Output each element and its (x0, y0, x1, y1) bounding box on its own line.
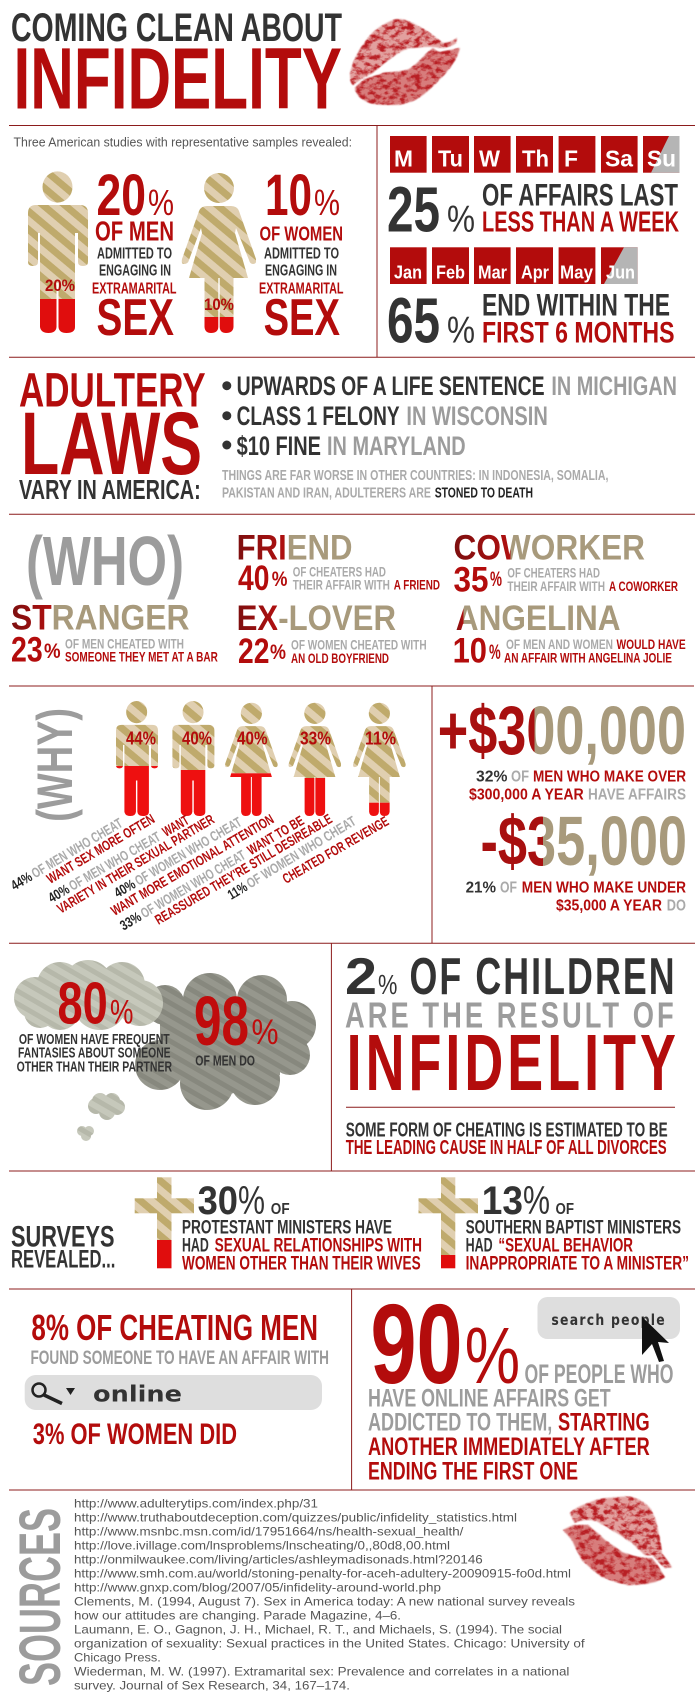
text: other countries: PAKISTAN AND IRAN, ADULTERERS ARE (222, 486, 431, 502)
list: state penalties: IN WISCONSIN (406, 401, 548, 431)
stat: angelina (453, 599, 686, 671)
panel: affair duration (387, 136, 680, 357)
stat: friend: 40 (238, 559, 269, 598)
icon: cross 13% (418, 1177, 478, 1268)
calendar: months: Apr (521, 262, 549, 282)
stat: 90% (370, 1281, 674, 1407)
stat: southern baptist ministers: “SEXUAL BEHAVIOR (498, 1235, 633, 1257)
stat: over 300,000: 32% (476, 769, 507, 786)
text: source list: Wiederman, M. W. (1997). Extramarital sex: Prevalence and correlates in a national (74, 1664, 569, 1678)
icon: light thought cloud (14, 960, 163, 1030)
stat: protestant ministers: 30 (198, 1179, 238, 1223)
text: angled reasons: OF WOMEN WHO CHEAT (132, 813, 245, 888)
text: 8% of cheating men (30, 1307, 329, 1369)
stat: protestant ministers: SEXUAL RELATIONSHIPS WITH (215, 1235, 422, 1257)
text: 10% of women: % (314, 182, 340, 223)
stat: protestant ministers: WOMEN OTHER THAN THEIR WIVES (182, 1252, 421, 1274)
stat: 90%: % (465, 1311, 520, 1400)
stat: stranger: STRANGER (11, 598, 190, 637)
panel: who (11, 522, 686, 671)
title (11, 6, 342, 128)
stat: under 35,000: 21% (466, 879, 496, 896)
heading: why: (WHY) (27, 708, 83, 822)
text: angled reasons: WANT MORE EMOTIONAL ATTENTION (108, 811, 276, 919)
text: angled reasons: REASSURED THEY'RE STILL DESIREABLE (152, 810, 335, 928)
stat: coworker: COWORKER (454, 528, 645, 567)
text: 20% of men: 20 (96, 163, 146, 228)
stat: friend: % (272, 568, 288, 591)
panel: fantasies (14, 960, 316, 1141)
calendar: months: May (560, 262, 593, 282)
stat: 2% of children: % (378, 969, 397, 1000)
stat: angelina: ANGELINA (456, 599, 621, 638)
text: source list: Clements, M. (1994, August 7). Sex in America today: A new national survey reveals (74, 1594, 575, 1608)
text: source list: organization of sexuality: Sexual practices in the United States. Chicago: University of (74, 1636, 585, 1650)
stat: 80% of women: 80 (58, 970, 108, 1036)
icon: dark thought cloud (135, 973, 316, 1110)
panel: sources (8, 1496, 672, 1692)
calendar: days of week: F (564, 146, 578, 172)
text: angled reasons: WANT SEX MORE OFTEN (44, 810, 157, 887)
icon: cursor arrow (642, 1317, 669, 1362)
stat: 2% of children (345, 948, 680, 1107)
stat: protestant ministers: OF (271, 1201, 290, 1218)
calendar: days of week: M (394, 146, 413, 172)
search bar: online: online (93, 1383, 182, 1408)
icon: man figure 20%: 20% (45, 277, 75, 295)
icon: tiny thought bubble (77, 1126, 94, 1141)
stat: stranger: OF MEN CHEATED WITH (65, 635, 184, 651)
text: 20% of men (92, 163, 177, 347)
stat: ex-lover: % (270, 641, 286, 664)
stat: friend: THEIR AFFAIR WITH (293, 576, 390, 592)
calendar: months: Mar (478, 262, 507, 282)
heading: surveys revealed: REVEALED... (11, 1245, 115, 1273)
stat: angelina: OF MEN AND WOMEN (506, 636, 613, 652)
stat: ex-lover: 22 (238, 632, 269, 671)
text: leading cause of divorce (346, 1120, 668, 1159)
calendar: months: Jun (606, 262, 635, 282)
list: state penalties: IN MARYLAND (327, 431, 466, 461)
stat: protestant ministers: PROTESTANT MINISTERS HAVE (182, 1216, 392, 1238)
text: angled reasons: OF MEN WHO CHEAT (28, 815, 125, 881)
icon: figure 44% (116, 700, 159, 817)
calendar: days of week: Su (647, 146, 676, 172)
text: angled reasons (8, 810, 391, 933)
calendar: months (390, 247, 638, 284)
stat: angelina: 10 (453, 632, 487, 671)
stat: 65% first 6 months: % (447, 310, 475, 352)
text: 10% of women: ENGAGING IN (265, 263, 337, 280)
text: addicted to online affairs: STARTING (558, 1409, 650, 1437)
panel: why (8, 700, 406, 933)
text: source list: http://www.smh.com.au/world/stoning-penalty-for-aceh-adultery-20090915-fo0d.html (74, 1566, 571, 1580)
stat: 25% less than a week: 25 (387, 174, 440, 246)
text: addicted to online affairs: ADDICTED TO THEM, (368, 1409, 552, 1437)
icon: figure 40% men (172, 700, 215, 817)
panel: American studies (14, 136, 352, 347)
stat: protestant ministers: HAD (182, 1235, 209, 1257)
stat: over 300,000 (438, 692, 686, 803)
stat: friend: FRIEND (237, 528, 352, 567)
text: angled reasons: OF WOMEN WHO CHEAT (138, 847, 248, 921)
text: source list (74, 1496, 585, 1692)
list: state penalties: UPWARDS OF A LIFE SENTENCE (237, 371, 545, 401)
calendar: days of week: Sa (605, 146, 633, 172)
text: source list: http://www.gnxp.com/blog/2007/05/infidelity-around-world.php (74, 1580, 441, 1594)
stat: 98% of men: 98 (194, 982, 249, 1060)
heading: adultery laws: LAWS (21, 393, 202, 493)
text: studies intro: Three American studies with representative samples revealed: (14, 136, 352, 150)
search box: search people: search people (551, 1311, 666, 1329)
text: 10% of women: OF WOMEN (260, 224, 343, 246)
stat: friend: OF CHEATERS HAD (293, 564, 386, 580)
text: angled reasons: WANT (159, 812, 192, 840)
icon: figure 40% women: 40% (237, 728, 268, 748)
stat: coworker: THEIR AFFAIR WITH (507, 578, 605, 594)
stat: 2% of children: 2 (345, 948, 377, 1006)
stat: coworker: OF CHEATERS HAD (507, 565, 600, 581)
stat: angelina: % (489, 641, 501, 664)
calendar: days of week: Tu (438, 146, 463, 172)
stat: protestant ministers: % (238, 1179, 265, 1223)
icon: figure 11%: 11% (365, 728, 396, 748)
title: INFIDELITY (14, 31, 342, 128)
stat: stranger: 23 (11, 631, 43, 670)
icon: small thought bubble (88, 1093, 125, 1120)
text: 20% of men: ENGAGING IN (99, 263, 171, 280)
stat: 80% of women: OF WOMEN HAVE FREQUENT (19, 1032, 170, 1048)
icon: man figure 20% (28, 171, 88, 333)
text: 10% of women: SEX (264, 289, 340, 347)
stat: ex-lover: OF WOMEN CHEATED WITH (291, 636, 427, 652)
stat: 80% of women: OTHER THAN THEIR PARTNER (17, 1060, 172, 1076)
stat: stranger (11, 598, 218, 670)
text: angled reasons: 44% (8, 868, 35, 893)
stat: 80% of women: FANTASIES ABOUT SOMEONE (18, 1046, 171, 1062)
stat: ex-lover: AN OLD BOYFRIEND (291, 650, 389, 666)
stat: protestant ministers (182, 1179, 422, 1274)
search bar: online (25, 1375, 322, 1410)
panel: income (438, 692, 687, 915)
stat: 65% first 6 months: 65 (387, 285, 440, 357)
stat: southern baptist ministers: HAD (466, 1235, 493, 1257)
text: angled reasons: 40% (111, 875, 138, 901)
text: source list: how our attitudes are changing. Parade Magazine, 4–6. (74, 1608, 401, 1622)
text: source list: http://www.truthaboutdeception.com/quizzes/public/infidelity_statistics.html (74, 1510, 517, 1524)
stat: stranger: % (44, 640, 61, 663)
list: state penalties (222, 371, 677, 461)
text: 20% of men: ADMITTED TO (97, 245, 172, 262)
icon: lipstick kiss small (563, 1497, 672, 1585)
text: 10% of women: ADMITTED TO (264, 245, 339, 262)
text: 3% of women: 3% OF WOMEN DID (33, 1418, 237, 1451)
text: angled reasons: OF MEN WHO CHEAT (66, 828, 163, 894)
stat: 98% of men: OF MEN DO (195, 1054, 255, 1070)
text: angled reasons: CHEATED FOR REVENGE (280, 813, 391, 887)
icon: lipstick kiss (350, 19, 460, 105)
text: addicted to online affairs (368, 1385, 650, 1485)
stat: coworker (454, 528, 678, 600)
text: 20% of men: % (148, 182, 174, 223)
calendar: days of week (390, 136, 680, 173)
icon: woman figure 10%: 10% (204, 296, 234, 314)
stat: over 300,000: $300,000 A YEAR (469, 786, 584, 803)
stat: 25% less than a week: % (447, 199, 475, 241)
stat: under 35,000: OF (500, 879, 517, 896)
heading: sources: SOURCES (8, 1508, 73, 1686)
text: source list: survey. Journal of Sex Research, 34, 167–174. (74, 1678, 350, 1692)
icon: figure 33% (288, 702, 341, 816)
text: source list: http://onmilwaukee.com/living/articles/ashleymadisonads.html?20146 (74, 1552, 483, 1566)
stat: 25% less than a week (387, 174, 679, 246)
text: 8% of cheating men: FOUND SOMEONE TO HAVE AN AFFAIR WITH (30, 1347, 329, 1369)
text: 8% of cheating men: 8% OF CHEATING MEN (31, 1307, 318, 1348)
stat: southern baptist ministers: OF (556, 1201, 574, 1218)
stat: friend (237, 528, 440, 598)
text: other countries: STONED TO DEATH (435, 486, 533, 502)
stat: stranger: SOMEONE THEY MET AT A BAR (65, 649, 218, 665)
text: addicted to online affairs: HAVE ONLINE AFFAIRS GET (368, 1385, 611, 1413)
icon: cross 30% (135, 1177, 194, 1268)
stat: ex-lover (237, 599, 427, 671)
icon: figure 33%: 33% (300, 728, 331, 748)
icon: figure 11% (352, 702, 406, 817)
icon: figure 40% women (224, 702, 278, 816)
icon: figure 40% men: 40% (182, 728, 212, 748)
stat: over 300,000: OF (511, 769, 529, 786)
text: angled reasons: WANT TO BE (244, 812, 307, 858)
text: source list: Chicago Press. (74, 1650, 161, 1664)
stat: under 35,000 (466, 802, 687, 915)
panel: online addiction (368, 1281, 680, 1485)
calendar: days of week: W (479, 146, 500, 172)
stat: 80% of women: % (110, 993, 133, 1031)
calendar: months: Jan (394, 262, 422, 282)
heading: adultery laws: ADULTERY (19, 365, 206, 418)
search box: search people (538, 1297, 680, 1362)
text: angled reasons: 40% (45, 881, 73, 906)
text: source list: Laumann, E. O., Gagnon, J. H., Michael, R. T., and Michaels, S. (1994). The social (74, 1622, 562, 1636)
list: state penalties: CLASS 1 FELONY (237, 401, 400, 431)
stat: southern baptist ministers: 13 (482, 1179, 523, 1223)
text: 10% of women: EXTRAMARITAL (259, 280, 344, 297)
text: source list: http://love.ivillage.com/lnsproblems/lnscheating/0,,80d8,00.html (74, 1538, 450, 1552)
calendar: days of week: Th (522, 146, 549, 172)
stat: under 35,000: $35,000 A YEAR (556, 898, 662, 915)
text: angled reasons: VARIETY IN THEIR SEXUAL PARTNER (54, 811, 217, 917)
text: 20% of men: SEX (96, 289, 174, 347)
text: other countries (222, 468, 608, 502)
heading: who: (WHO) (26, 522, 184, 600)
text: addicted to online affairs: ENDING THE FIRST ONE (368, 1457, 578, 1485)
heading: surveys revealed (11, 1221, 115, 1273)
stat: 98% of men: % (252, 1013, 278, 1052)
stat: under 35,000: DO (667, 898, 686, 915)
stat: 90%: 90 (370, 1281, 462, 1407)
stat: southern baptist ministers: % (523, 1179, 550, 1223)
text: 20% of men: OF MEN (95, 216, 174, 247)
panel: surveys (11, 1177, 689, 1274)
stat: 80% of women (17, 970, 172, 1076)
text: 10% of women: 10 (265, 163, 312, 228)
text: angled reasons: 33% (117, 908, 144, 933)
stat: southern baptist ministers (466, 1179, 689, 1274)
title: COMING CLEAN ABOUT (11, 6, 342, 50)
heading: adultery laws: VARY IN AMERICA: (19, 474, 201, 505)
panel: adultery laws (19, 365, 677, 505)
heading: surveys revealed: SURVEYS (11, 1221, 114, 1254)
icon: figure 44%: 44% (126, 728, 156, 748)
text: angled reasons: 11% (225, 878, 250, 903)
text: 10% of women (259, 163, 344, 347)
stat: friend: A FRIEND (394, 576, 440, 592)
list: state penalties: $10 FINE (237, 431, 321, 461)
stat: ex-lover: EX-LOVER (237, 599, 396, 638)
panel: children (345, 948, 680, 1159)
icon: woman figure 10% (181, 173, 256, 333)
text: angled reasons: OF WOMEN WHO CHEAT (243, 813, 359, 891)
text: source list: http://www.msnbc.msn.com/id/17951664/ns/health-sexual_health/ (74, 1524, 464, 1538)
stat: coworker: % (490, 568, 502, 591)
heading: adultery laws (19, 365, 206, 505)
text: 20% of men: EXTRAMARITAL (92, 280, 177, 297)
panel: found online (25, 1307, 329, 1451)
text: source list: http://www.adulterytips.com/index.php/31 (74, 1496, 318, 1510)
stat: coworker: 35 (454, 561, 488, 600)
stat: 65% first 6 months (387, 285, 674, 357)
calendar: months: Feb (436, 262, 465, 282)
